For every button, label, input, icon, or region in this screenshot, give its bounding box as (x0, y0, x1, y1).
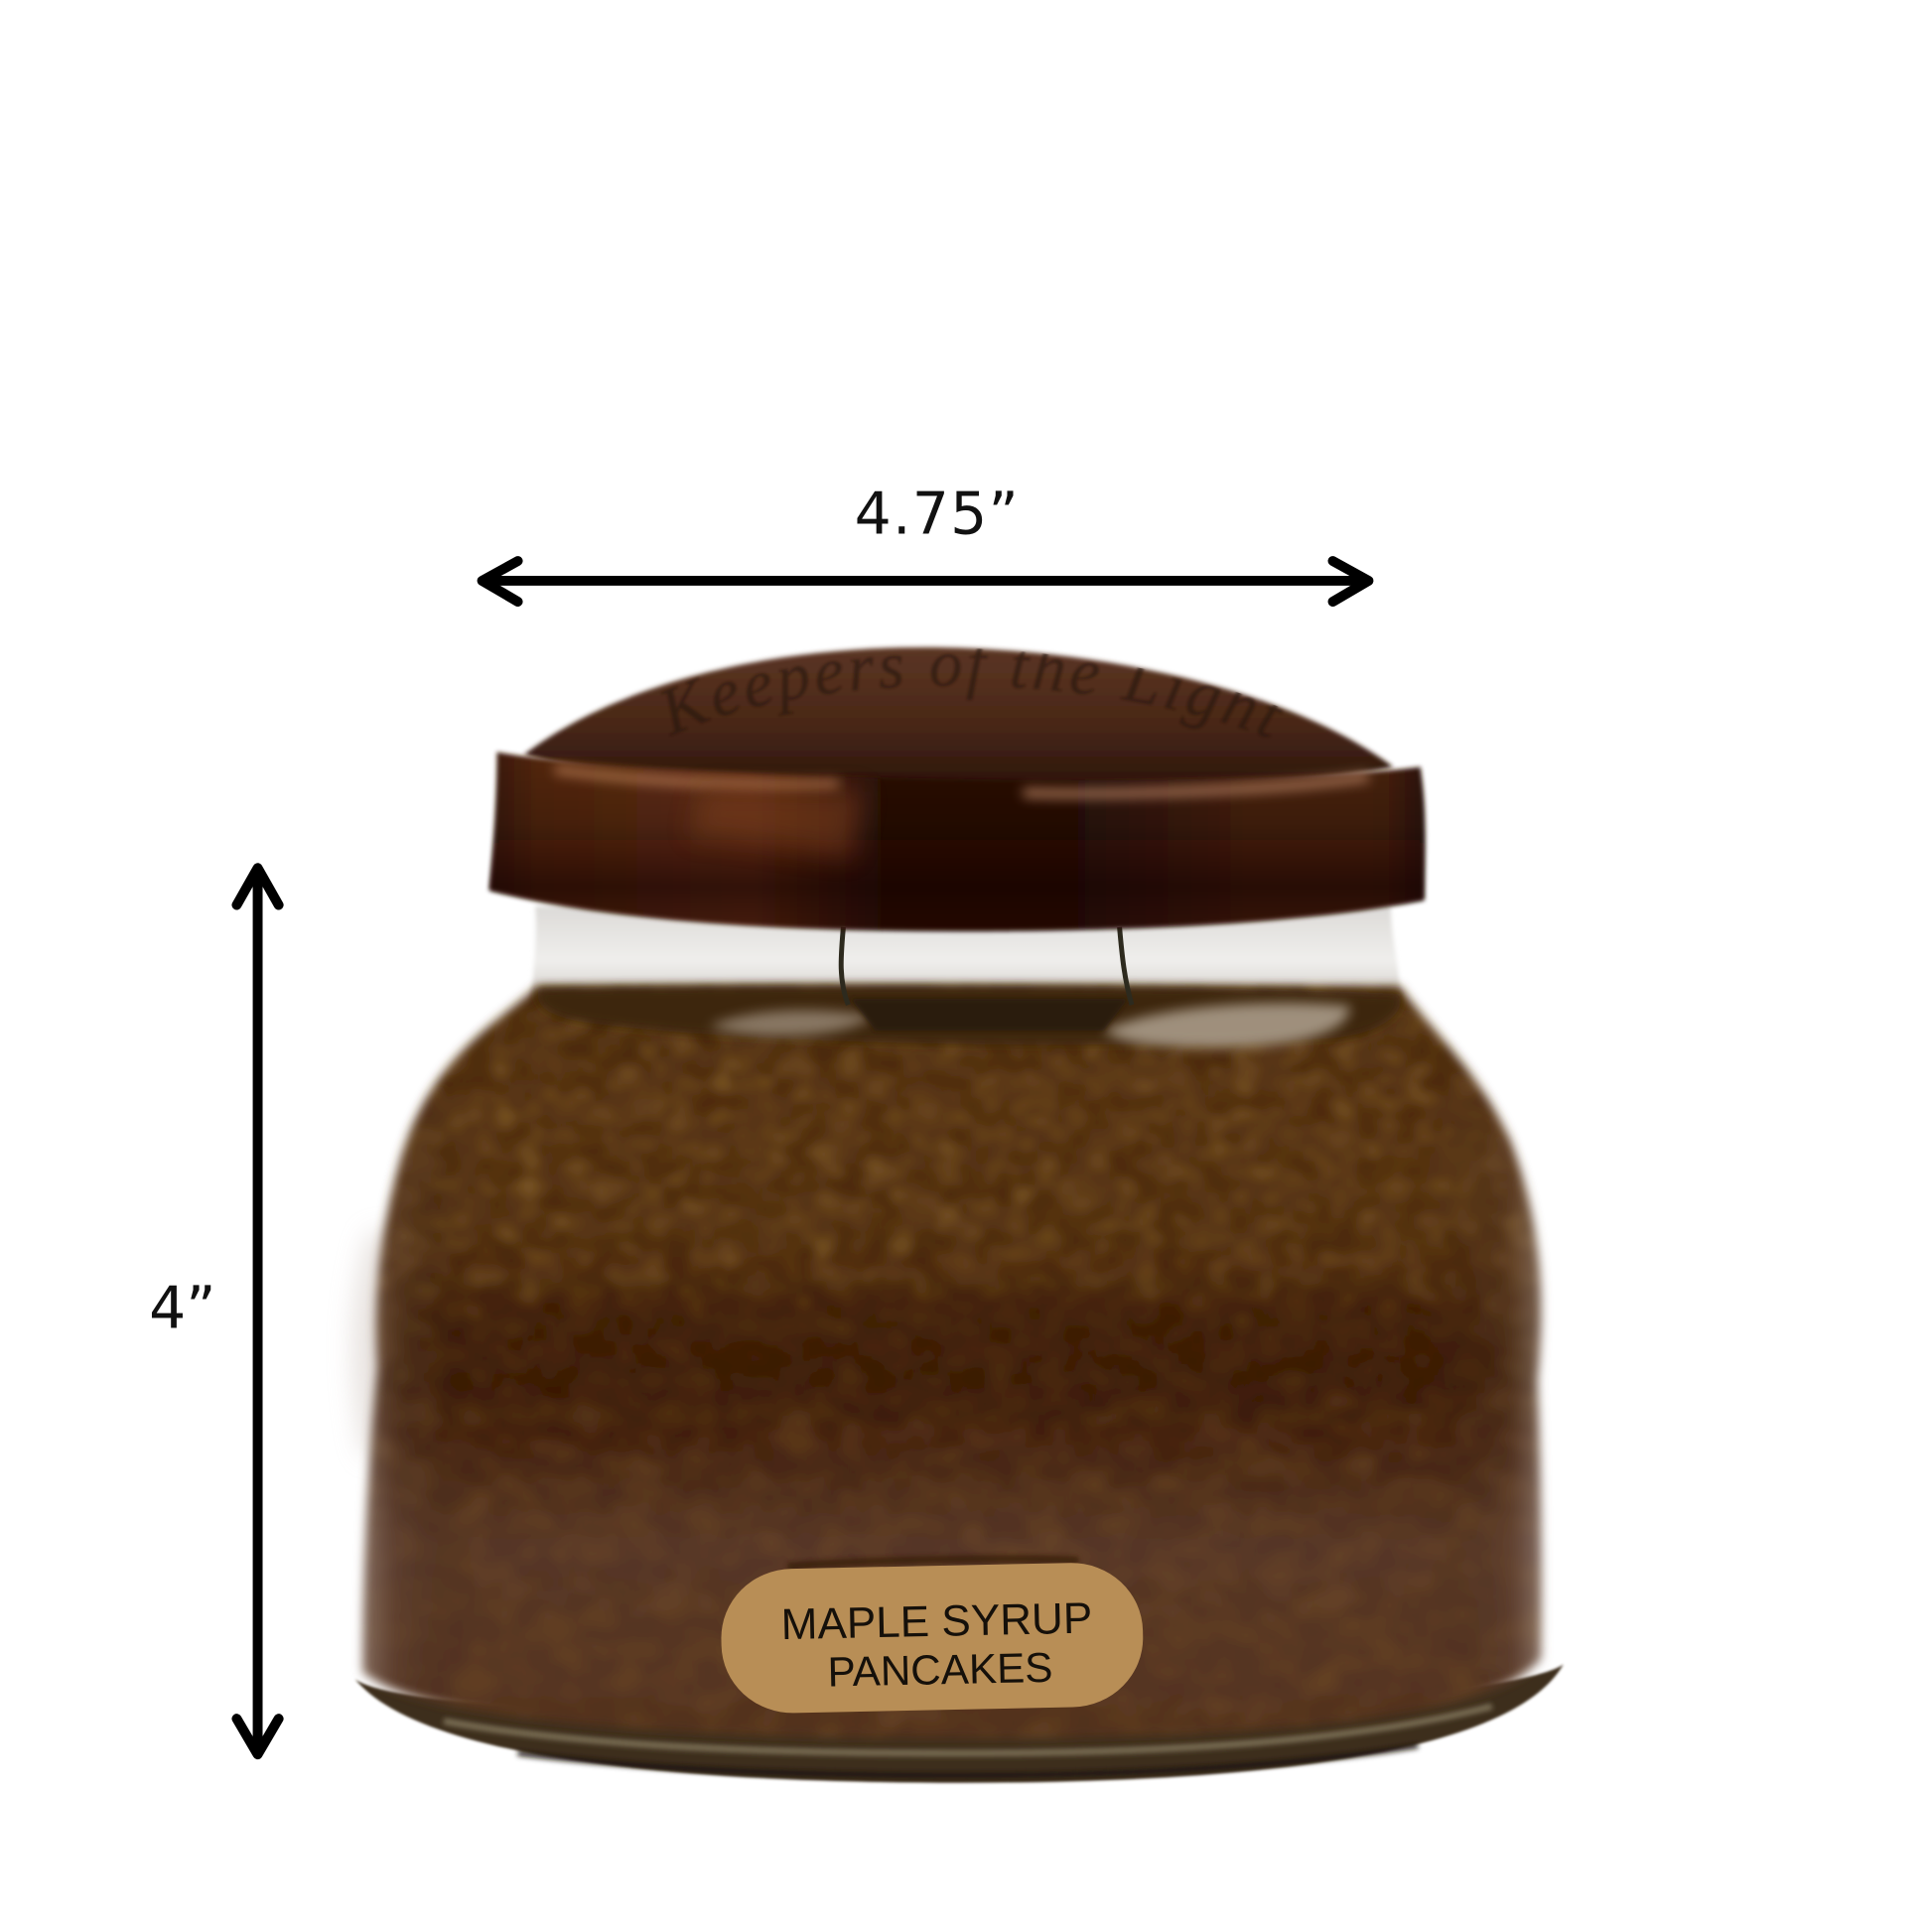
label text (780, 1594, 1094, 1697)
product label (720, 1556, 1145, 1715)
wax top surface (538, 986, 1401, 1048)
jar product photo (345, 588, 1565, 1785)
jar glass neck (530, 906, 1402, 1005)
lid band (489, 753, 1425, 931)
candle wicks (841, 927, 1132, 1005)
height label: 4” (149, 1274, 215, 1341)
embossed lid lettering: Keepers of the Light (661, 648, 1283, 737)
wax body (345, 974, 1579, 1763)
jar glass base (355, 1665, 1564, 1783)
label text: PANCAKES (827, 1644, 1053, 1696)
width label: 4.75” (855, 481, 1020, 548)
arrow: height dimension (236, 868, 279, 1754)
lid dome (522, 643, 1396, 784)
arrow: width dimension (483, 561, 1368, 602)
soft halo around jar (352, 1233, 407, 1454)
infographic: candle jar with dimensions (151, 490, 1565, 1785)
label text: MAPLE SYRUP (780, 1594, 1093, 1649)
